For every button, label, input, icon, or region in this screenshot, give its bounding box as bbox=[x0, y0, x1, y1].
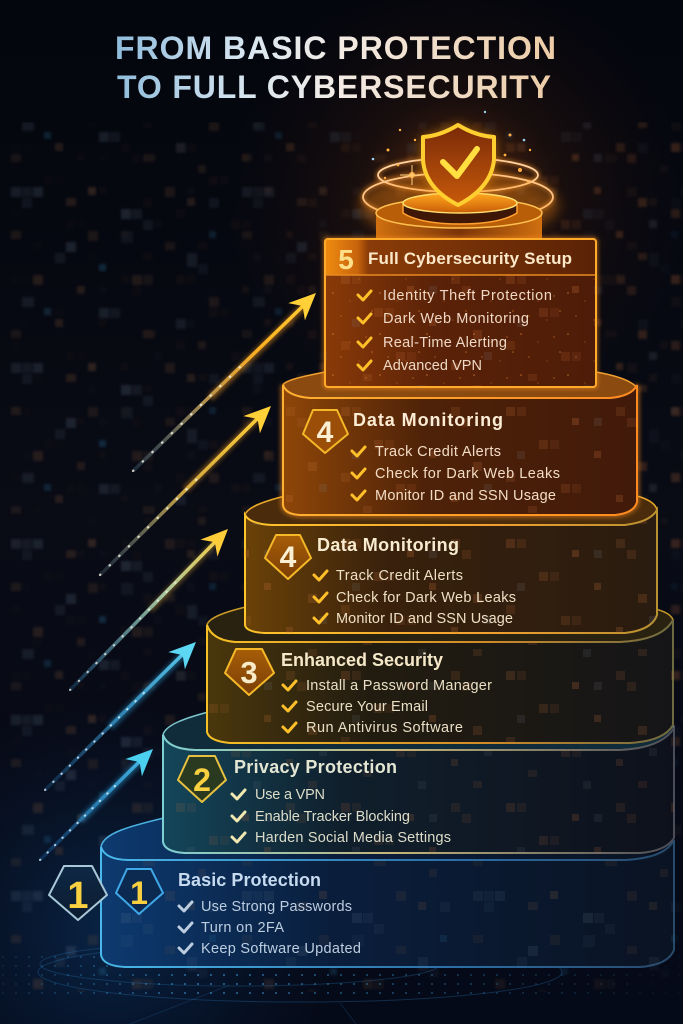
heading: basic protection: Basic Protection bbox=[178, 870, 321, 890]
list: privacy protection: Use a VPN bbox=[255, 787, 325, 803]
heading: data monitoring upper: Data Monitoring bbox=[353, 410, 503, 430]
list: enhanced security: Run Antivirus Software bbox=[306, 720, 463, 736]
arrow 5 bbox=[133, 284, 324, 471]
badge: 3: 3 bbox=[240, 655, 258, 690]
sparks bbox=[372, 111, 531, 185]
list: enhanced security: Install a Password Manager bbox=[306, 678, 492, 694]
title bbox=[115, 30, 556, 105]
list: basic protection: Keep Software Updated bbox=[201, 941, 361, 957]
badge: 2: 2 bbox=[193, 762, 211, 798]
list: data monitoring upper: Check for Dark Web Leaks bbox=[375, 466, 560, 482]
badge: 2 bbox=[178, 756, 226, 802]
badge: 3 bbox=[225, 649, 274, 695]
pedestal bbox=[359, 171, 559, 240]
badge: 4 upper: 4 bbox=[317, 416, 334, 449]
list: full cybersecurity setup: Identity Theft Protection bbox=[383, 288, 552, 304]
list: data monitoring upper: Track Credit Alerts bbox=[375, 444, 501, 460]
list: full cybersecurity setup: Advanced VPN bbox=[383, 358, 482, 374]
list: full cybersecurity setup bbox=[358, 288, 552, 374]
list: data monitoring: Monitor ID and SSN Usage bbox=[336, 611, 513, 627]
list: full cybersecurity setup: Dark Web Monitoring bbox=[383, 311, 529, 327]
heading: data monitoring: Data Monitoring bbox=[317, 535, 459, 555]
badge: 4: 4 bbox=[280, 541, 297, 574]
badge: 5: 5 bbox=[338, 244, 354, 275]
badge: 4 bbox=[265, 535, 311, 579]
heading: privacy protection: Privacy Protection bbox=[234, 757, 397, 777]
list: data monitoring upper bbox=[352, 444, 560, 504]
list: basic protection bbox=[179, 899, 361, 957]
icon: shield bbox=[423, 125, 494, 205]
list: data monitoring: Check for Dark Web Leaks bbox=[336, 590, 516, 606]
list: privacy protection: Enable Tracker Blocking bbox=[255, 809, 410, 825]
tier 2: privacy protection bbox=[163, 711, 674, 853]
badge: 4 upper bbox=[303, 410, 348, 453]
heading: enhanced security: Enhanced Security bbox=[281, 650, 443, 670]
badge: inner 1: 1 bbox=[130, 875, 148, 911]
arrow 3 bbox=[70, 521, 236, 690]
list: basic protection: Use Strong Passwords bbox=[201, 899, 352, 915]
list: basic protection: Turn on 2FA bbox=[201, 920, 284, 936]
heading: full cybersecurity setup: Full Cybersecurity Setup bbox=[368, 249, 572, 268]
title: FROM BASIC PROTECTION bbox=[115, 30, 556, 66]
list: data monitoring upper: Monitor ID and SSN Usage bbox=[375, 488, 556, 504]
badge: inner 1 bbox=[116, 869, 163, 914]
badge: outer 1 bbox=[49, 866, 107, 920]
badge: outer 1: 1 bbox=[67, 875, 89, 917]
arrow 4 bbox=[100, 397, 279, 575]
tier 3: enhanced security bbox=[207, 606, 673, 743]
list: data monitoring bbox=[314, 568, 516, 627]
tier 4a: data monitoring bbox=[245, 496, 657, 633]
tier 5: full cybersecurity setup bbox=[323, 237, 598, 389]
tier 1: basic protection bbox=[49, 817, 674, 967]
list: full cybersecurity setup: Real-Time Alerting bbox=[383, 335, 507, 351]
list: privacy protection bbox=[232, 787, 451, 846]
orbit rings bbox=[363, 158, 553, 221]
list: privacy protection: Harden Social Media Settings bbox=[255, 830, 451, 846]
list: data monitoring: Track Credit Alerts bbox=[336, 568, 463, 584]
arrow 2 bbox=[45, 633, 204, 790]
list: enhanced security: Secure Your Email bbox=[306, 699, 428, 715]
list: enhanced security bbox=[283, 678, 492, 736]
tier 4b: data monitoring bbox=[283, 372, 637, 515]
arrow 1 bbox=[40, 740, 161, 860]
title: TO FULL CYBERSECURITY bbox=[117, 69, 551, 105]
